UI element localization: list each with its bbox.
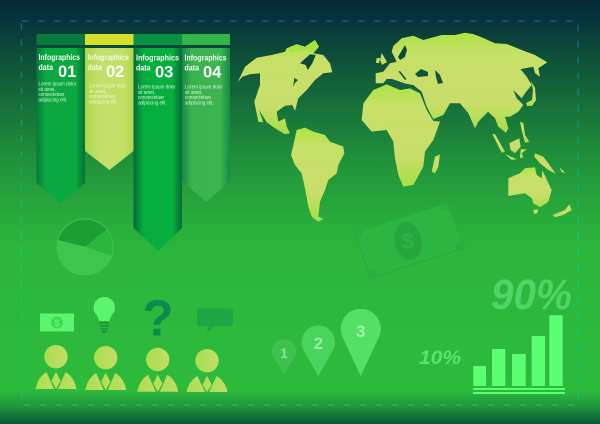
panel: ribbon 04: data bbox=[184, 62, 199, 72]
panel: ribbon 04: consectetuer bbox=[185, 95, 211, 101]
map pin 3: 3 bbox=[356, 322, 365, 341]
icon: small banknote bbox=[40, 314, 74, 332]
panel: ribbon 03: Lorem ipsum dolor bbox=[138, 84, 176, 91]
panel: ribbon 02: Lorem ipsum dolor bbox=[89, 83, 127, 90]
panel: ribbon 01 bbox=[36, 34, 85, 203]
panel: ribbon 02 bbox=[85, 34, 134, 170]
person 3 bbox=[137, 348, 178, 392]
panel: ribbon 04: adipiscing elit. bbox=[185, 100, 214, 106]
panel: ribbon 03 bbox=[134, 34, 182, 251]
panel: ribbon 02: 02 bbox=[106, 63, 124, 81]
person 4 bbox=[186, 349, 228, 392]
panel: ribbon 03: sit amet, bbox=[138, 90, 155, 96]
map pin 1: 1 bbox=[280, 345, 288, 361]
panel: ribbon 02: sit amet, bbox=[89, 89, 106, 95]
map pin 1 bbox=[272, 339, 296, 374]
world map bbox=[238, 33, 572, 222]
icon: speech bubble bbox=[197, 308, 233, 333]
panel: ribbon 01: consectetuer bbox=[38, 92, 65, 98]
person 1 bbox=[36, 345, 76, 389]
panel: ribbon 03: 03 bbox=[155, 64, 173, 82]
panel: ribbon 03: data bbox=[136, 62, 151, 72]
map pin 3 bbox=[341, 309, 381, 376]
panel: ribbon 04 bbox=[182, 34, 230, 202]
panel: ribbon 02: adipiscing elit. bbox=[89, 99, 118, 105]
icon: lightbulb bbox=[94, 297, 115, 332]
panel: ribbon 03: adipiscing elit. bbox=[138, 100, 167, 106]
panel: ribbon 02: Infographics bbox=[88, 52, 129, 62]
panel: ribbon 01: Lorem ipsum dolor bbox=[38, 81, 77, 88]
icon: small banknote: $ bbox=[54, 318, 60, 329]
icon: large faded banknote bbox=[355, 203, 465, 278]
panel: ribbon 04: 04 bbox=[203, 64, 222, 82]
panel: ribbon 03: Infographics bbox=[136, 52, 179, 62]
panel: ribbon 01: 01 bbox=[58, 63, 76, 81]
icon: question mark: ? bbox=[142, 290, 174, 346]
label: 10 percent: 10% bbox=[419, 348, 461, 369]
map pin 2: 2 bbox=[314, 334, 323, 353]
panel: ribbon 01: Infographics bbox=[38, 52, 80, 62]
panel: ribbon 03: consectetuer bbox=[138, 95, 164, 101]
panel: ribbon 04: Infographics bbox=[184, 52, 227, 62]
panel: ribbon 01: data bbox=[38, 62, 53, 72]
panel: ribbon 02: data bbox=[88, 62, 102, 72]
person 2 bbox=[85, 346, 126, 390]
panel: ribbon 01: sit amet, bbox=[38, 87, 56, 93]
panel: ribbon 04: Lorem ipsum dolor bbox=[185, 84, 223, 91]
label: 90 percent: 90% bbox=[491, 271, 572, 319]
map pin 2 bbox=[302, 325, 335, 376]
pie chart bbox=[56, 218, 114, 276]
bar chart bbox=[473, 315, 565, 394]
panel: ribbon 04: sit amet, bbox=[185, 90, 202, 96]
panel: ribbon 01: adipiscing elit. bbox=[38, 97, 67, 103]
icon: large faded banknote: $ bbox=[402, 229, 414, 254]
panel: ribbon 02: consectetuer bbox=[89, 94, 115, 100]
